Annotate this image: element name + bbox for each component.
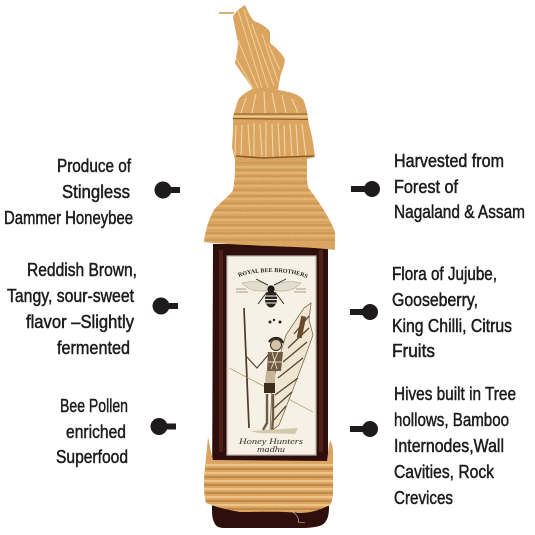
text: bee pollen enriched superfood xyxy=(56,395,128,467)
text: harvested from forest: Harvested from xyxy=(394,150,504,171)
text: reddish brown flavor: flavor –Slightly xyxy=(26,311,135,332)
text: flora: Flora of Jujube, xyxy=(392,263,497,284)
marker: left middle xyxy=(152,298,178,314)
marker: left bottom xyxy=(150,418,176,435)
text: bee pollen enriched superfood: enriched xyxy=(66,421,126,442)
illustration: honey hunter with spear and feather shield xyxy=(229,303,313,434)
text: reddish brown flavor: Reddish Brown, xyxy=(27,259,137,280)
text: hives: hollows, Bamboo xyxy=(394,409,509,430)
bottle body xyxy=(212,244,329,528)
text: hives: Internodes,Wall xyxy=(394,435,504,456)
text: harvested from forest: Forest of xyxy=(394,176,459,197)
label product name: Honey Hunters xyxy=(238,436,304,446)
text: produce of stingless dammer honeybee: Stingless xyxy=(62,181,130,202)
text: produce of stingless dammer honeybee xyxy=(4,155,133,228)
left callouts xyxy=(4,155,137,467)
marker: right top xyxy=(351,181,380,197)
right callouts xyxy=(392,150,525,508)
label xyxy=(226,255,317,456)
text: flora xyxy=(392,263,512,361)
icon: bee xyxy=(236,279,306,308)
jute base wrap xyxy=(200,436,336,523)
jute tuft xyxy=(219,5,285,90)
text: flora: King Chilli, Citrus xyxy=(392,315,512,336)
label variant: madhu xyxy=(257,445,285,454)
text: hives xyxy=(394,383,516,508)
label brand name: ROYAL BEE BROTHERS xyxy=(238,268,308,278)
jute neck and shoulder wrap xyxy=(200,85,340,253)
text: reddish brown flavor xyxy=(7,259,137,358)
text: reddish brown flavor: fermented xyxy=(57,337,130,358)
text: flora: Gooseberry, xyxy=(392,289,478,310)
text: hives: Cavities, Rock xyxy=(394,461,495,482)
text: bee pollen enriched superfood: Bee Pollen xyxy=(60,395,128,416)
marker: right middle xyxy=(350,304,378,320)
bottle xyxy=(204,5,335,528)
text: flora: Fruits xyxy=(392,340,435,361)
text: bee pollen enriched superfood: Superfood xyxy=(56,446,128,467)
glass highlight xyxy=(219,250,323,452)
text: hives: Crevices xyxy=(394,487,453,508)
text: harvested from forest xyxy=(394,150,525,222)
text: produce of stingless dammer honeybee: Produce of xyxy=(57,155,132,176)
marker: right bottom xyxy=(350,421,378,437)
text: produce of stingless dammer honeybee: Dammer Honeybee xyxy=(4,207,133,228)
marker: left top xyxy=(154,182,180,198)
text: reddish brown flavor: Tangy, sour-sweet xyxy=(7,285,134,306)
